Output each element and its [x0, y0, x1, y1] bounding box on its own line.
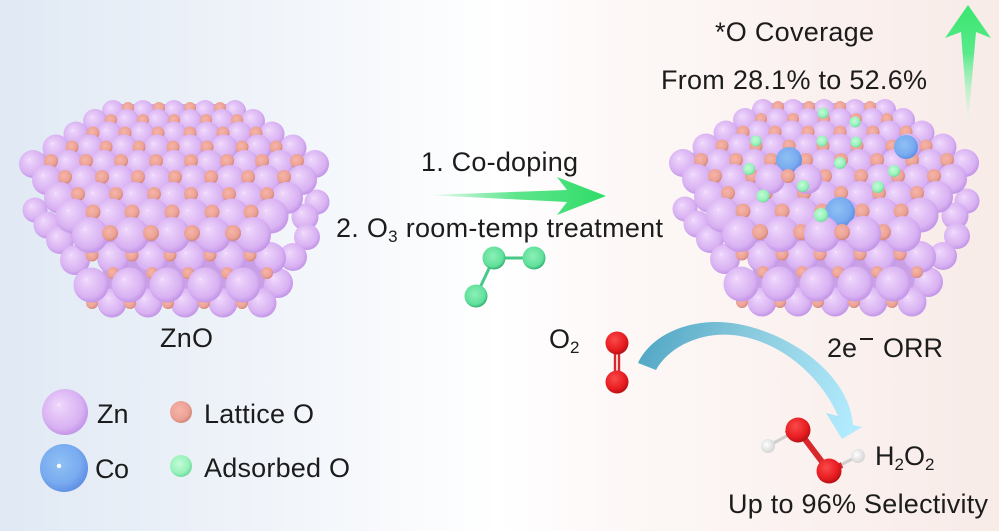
- label: H2O2: 2: [894, 455, 904, 474]
- step 2 label: 3: [388, 227, 398, 246]
- label: O2: 2: [570, 338, 579, 357]
- arrow: process direction: [427, 177, 606, 215]
- icon: H2O2 molecule: [761, 418, 865, 484]
- label: 2e- ORR: [827, 333, 943, 363]
- label: 2e- ORR: 2e: [827, 333, 857, 363]
- label: 2e- ORR: ORR: [883, 333, 943, 363]
- arrow: coverage increase: [945, 5, 991, 125]
- legend: Lattice O: Lattice O: [204, 399, 314, 429]
- label: H2O2: O: [904, 441, 925, 471]
- label: H2O2: 2: [925, 455, 934, 474]
- text: coverage values: From 28.1% to 52.6%: [661, 65, 927, 95]
- arrow: curved reaction path: [638, 322, 862, 439]
- legend: Zn: [42, 389, 129, 435]
- legend: [40, 389, 350, 492]
- text: selectivity: Up to 96% Selectivity: [728, 489, 988, 519]
- legend: Adsorbed O: Adsorbed O: [204, 453, 350, 483]
- label: H2O2: H: [875, 441, 894, 471]
- heading: O coverage: *O Coverage: [715, 17, 874, 47]
- legend: Co: Co: [95, 454, 129, 484]
- step 2 label: room-temp treatment: [398, 213, 663, 243]
- label: ZnO: ZnO: [160, 323, 213, 353]
- step 2 label: 2. O: [336, 213, 388, 243]
- step 1 label: 1. Co-doping: [421, 147, 578, 177]
- icon: O2 molecule: [606, 332, 628, 394]
- label: O2: O: [549, 324, 570, 354]
- icon: Co-doped ZnO nanocluster: [669, 99, 980, 316]
- icon: ozone molecule: [464, 246, 546, 308]
- icon: ZnO nanocluster: [19, 100, 330, 318]
- legend: Co: [40, 444, 129, 492]
- legend: Zn: Zn: [97, 399, 129, 429]
